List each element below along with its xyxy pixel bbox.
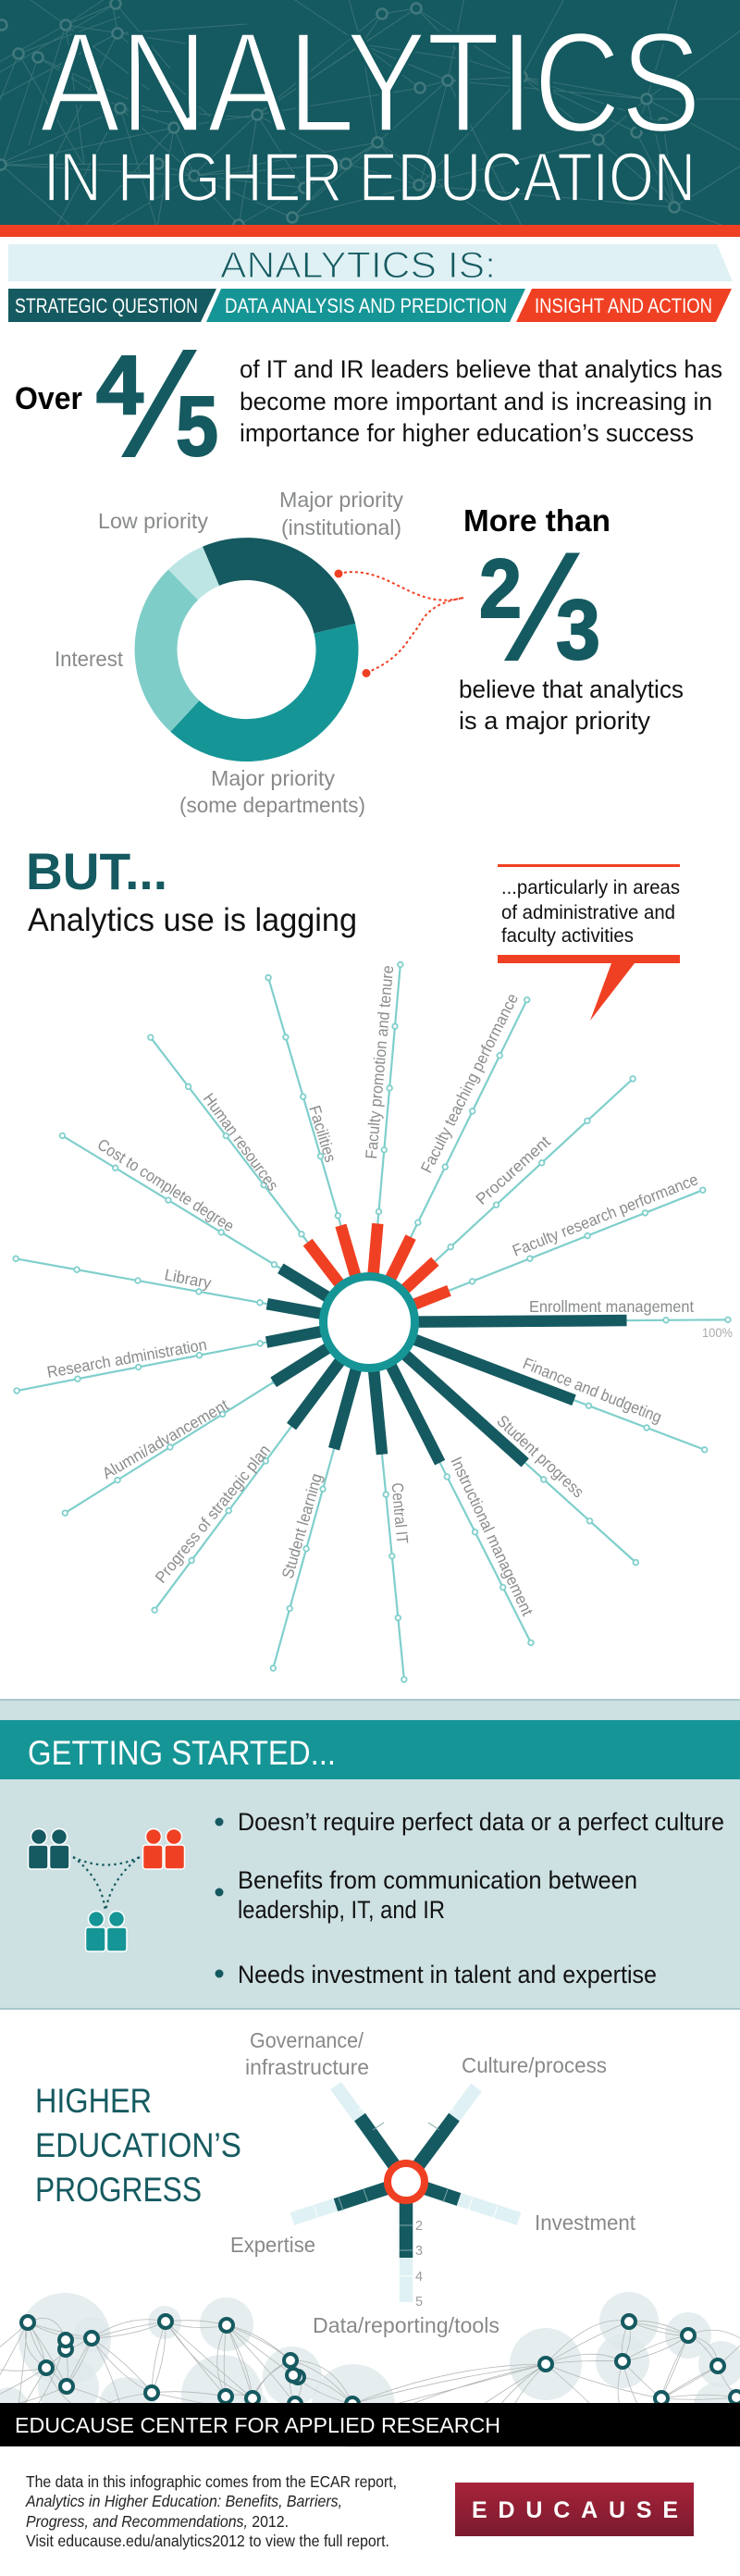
scale numbers [415,2218,423,2310]
source note: Visit educause.edu/analytics2012 to view the full report. [26,2532,389,2550]
chevron: strategic question [8,289,216,322]
text: importance statement: importance for higher education’s success [240,419,694,447]
spoke: procurement [395,1075,636,1298]
spoke: student progress [396,1345,639,1567]
scale numbers: 3 [415,2243,423,2259]
spoke: faculty promotion and tenure: Faculty promotion and tenure [362,964,397,1159]
scale numbers: 4 [415,2269,423,2285]
header banner [0,0,740,239]
stat: over 4/5 [15,340,218,474]
red stripe [0,225,740,237]
chevron: data analysis and prediction: DATA ANALYSIS AND PREDICTION [225,294,507,317]
logo: educause [455,2483,694,2536]
spoke: instructional management [384,1355,537,1646]
spoke: instructional management: Instructional management [447,1454,537,1618]
donut chart [135,538,358,762]
stat: over 4/5: Over [15,381,82,416]
donut labels: (institutional) [281,515,401,539]
spoke: finance and budgeting [403,1333,708,1453]
text: importance statement: become more important and is increasing in [240,388,712,415]
spoke: student learning [270,1358,362,1671]
donut labels: Interest [55,647,124,671]
star chart labels: Culture/process [462,2053,607,2077]
arm: data reporting tools [400,2182,413,2302]
donut labels: Low priority [98,509,208,533]
source note: Analytics in Higher Education: Benefits, Barriers, [25,2492,342,2510]
spoke: research administration [14,1327,332,1393]
stat: more than 2/3: More than [463,503,610,538]
spoke: research administration: Research administration [45,1335,208,1381]
scale ticks [314,2103,498,2276]
spoke: progress of strategic plan: Progress of strategic plan [152,1441,274,1587]
spoke: alumni advancement: Alumni/advancement [99,1395,231,1482]
stat: more than 2/3: is a major priority [459,707,651,735]
spoke: alumni advancement [61,1340,339,1517]
chevron: insight and action: INSIGHT AND ACTION [535,294,712,317]
source note: Progress, and Recommendations, 2012. [26,2512,289,2531]
callout: administrative and faculty: ...particularly in areas [501,876,680,898]
icon: connection dots [73,1857,140,1912]
panel: getting started [0,1699,740,2010]
footer network background [0,2292,740,2447]
star chart labels: Investment [535,2211,636,2235]
stat: over 4/5: 4 [96,340,143,432]
spoke: faculty teaching performance [384,990,530,1289]
heading: higher education's progress: EDUCATION’S [35,2126,241,2164]
icon: people red [142,1828,185,1869]
arm: governance infrastructure [336,2086,406,2182]
spoke: library [13,1256,332,1318]
star chart labels: Data/reporting/tools [313,2313,500,2337]
callout: administrative and faculty [498,864,680,1021]
spoke: facilities: Facilities [305,1103,340,1165]
donut labels: Major priority [279,488,403,512]
spoke: faculty promotion and tenure [362,961,403,1284]
star chart: progress [230,2028,636,2337]
heading: higher education's progress [35,2082,241,2209]
banner: getting started: GETTING STARTED... [28,1734,336,1772]
arm: culture process [406,2087,476,2182]
bullet list [215,1808,724,1988]
star chart labels: Expertise [230,2233,315,2257]
callout: administrative and faculty: of administrative and [501,901,675,923]
heading: but: Analytics use is lagging [28,902,357,938]
spoke: human resources [147,1034,348,1294]
spoke: enrollment management: 100% [702,1325,733,1340]
bullet list: Benefits from communication between [238,1866,637,1894]
spoke: student progress: Student progress [493,1411,588,1502]
bullet list: Needs investment in talent and expertise [238,1961,657,1988]
spoke: cost to complete degree: Cost to complete degree [94,1135,238,1235]
stat: more than 2/3 [459,503,684,735]
spoke: faculty research performance [403,1170,706,1311]
icon: people teal [85,1912,127,1951]
stat: more than 2/3: 3 [556,583,600,677]
stat: over 4/5: 5 [176,379,218,474]
spoke: central it: Central IT [388,1482,412,1544]
callout: dotted connector [335,570,463,677]
star chart labels: Governance/ [250,2028,364,2052]
banner: getting started [0,1720,740,1779]
chevron: data analysis and prediction [206,289,525,322]
spoke: faculty research performance: Faculty research performance [510,1170,700,1260]
donut labels: (some departments) [179,793,365,817]
chevron: insight and action [516,289,732,322]
radial chart: analytics use [13,961,733,1682]
icon: people dark [28,1828,69,1869]
panel: analytics is [8,244,733,286]
heading: higher education's progress: PROGRESS [35,2171,202,2209]
spoke: student learning: Student learning [278,1471,326,1580]
heading: but: BUT... [26,842,167,900]
heading: higher education's progress: HIGHER [35,2082,152,2120]
donut labels: Major priority [211,766,335,790]
spoke: finance and budgeting: Finance and budgeting [521,1354,664,1427]
scale numbers: 5 [415,2294,423,2310]
spoke: human resources: Human resources [200,1090,283,1195]
chevron: strategic question: STRATEGIC QUESTION [15,294,198,317]
donut labels [55,488,403,817]
spoke: enrollment management: Enrollment management [529,1297,694,1316]
spoke: procurement: Procurement [472,1132,554,1208]
spoke: progress of strategic plan [151,1351,349,1614]
text: importance statement: of IT and IR leaders believe that analytics has [240,355,722,383]
source note: The data in this infographic comes from the ECAR report, [26,2472,397,2491]
text: importance statement [240,355,722,447]
scale numbers: 2 [415,2218,423,2234]
spoke: facilities [265,974,361,1286]
spoke: faculty teaching performance: Faculty teaching performance [417,990,522,1176]
stat: more than 2/3: 2 [479,543,522,636]
heading: but [26,842,357,938]
footer bar [0,2403,740,2446]
source note [25,2472,397,2550]
stat: more than 2/3: believe that analytics [459,675,684,703]
star chart labels: infrastructure [245,2055,369,2079]
spoke: cost to complete degree [59,1133,338,1305]
arm: investment [406,2182,519,2219]
arm: expertise [292,2182,406,2219]
spoke: central it [370,1360,412,1682]
spoke: enrollment management [407,1297,733,1340]
callout: administrative and faculty: faculty activities [501,924,634,947]
hub ring [388,2163,425,2200]
spoke: library: Library [163,1265,213,1293]
chart hub ring [324,1277,414,1368]
star chart labels [230,2028,636,2337]
logo: educause: EDUCAUSE [472,2497,678,2523]
bullet list: leadership, IT, and IR [238,1896,445,1924]
footer bar: EDUCAUSE CENTER FOR APPLIED RESEARCH [15,2413,500,2437]
panel: analytics is: ANALYTICS IS: [220,245,496,286]
